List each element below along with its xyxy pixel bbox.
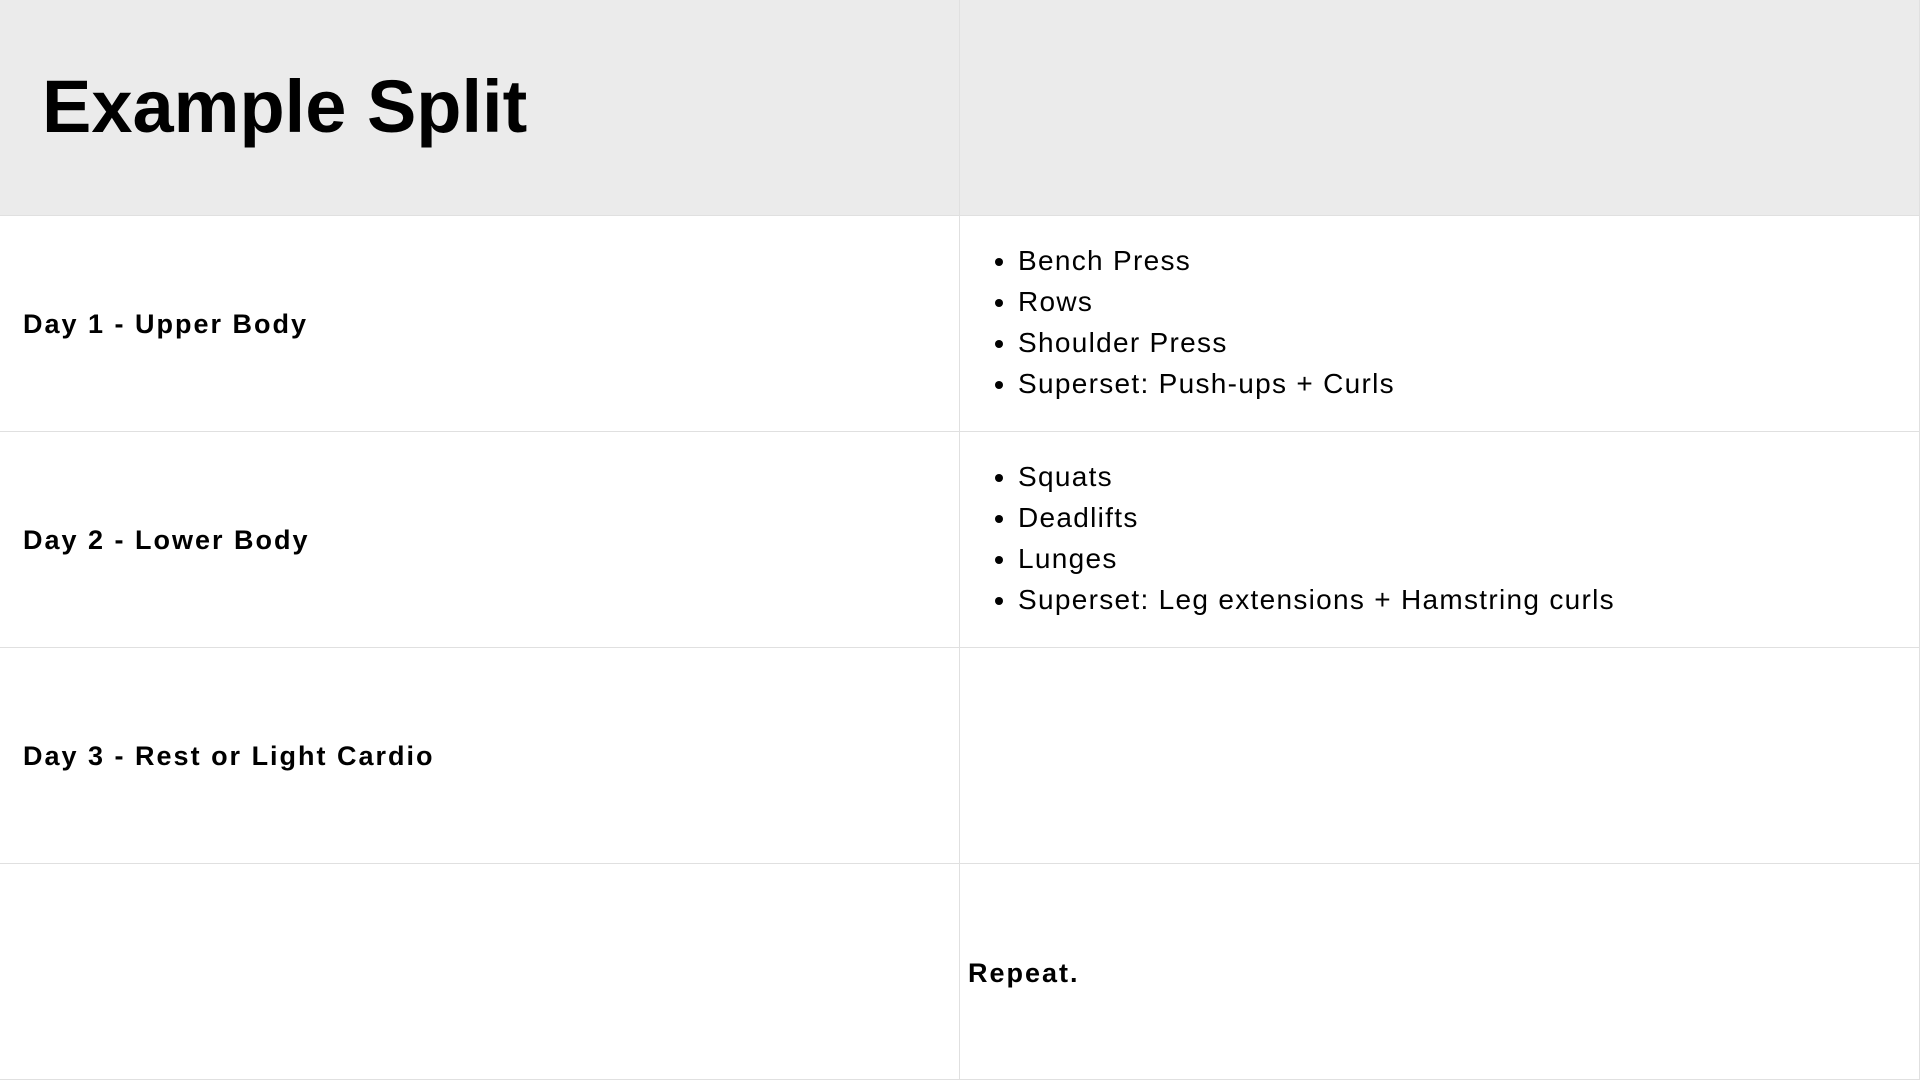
list: day 1 exercises: Shoulder Press [1018, 327, 1228, 358]
list: day 1 exercises: Superset: Push-ups + Curls [1018, 368, 1395, 399]
repeat text: Repeat. [968, 958, 1080, 988]
row label: day 3: Day 3 - Rest or Light Cardio [23, 741, 435, 771]
list: day 2 exercises [995, 461, 1615, 615]
list: day 1 exercises [995, 245, 1395, 399]
row label: day 1: Day 1 - Upper Body [23, 309, 308, 339]
list: day 2 exercises: Deadlifts [1018, 502, 1139, 533]
title: Example Split [42, 65, 527, 148]
list: day 2 exercises: Lunges [1018, 543, 1118, 574]
list: day 1 exercises: Rows [1018, 286, 1093, 317]
list: day 2 exercises: Superset: Leg extensions + Hamstring curls [1018, 584, 1615, 615]
list: day 1 exercises: Bench Press [1018, 245, 1191, 276]
list: day 2 exercises: Squats [1018, 461, 1113, 492]
header row background [0, 0, 960, 216]
row label: day 2: Day 2 - Lower Body [23, 525, 310, 555]
table grid [0, 216, 1920, 1080]
